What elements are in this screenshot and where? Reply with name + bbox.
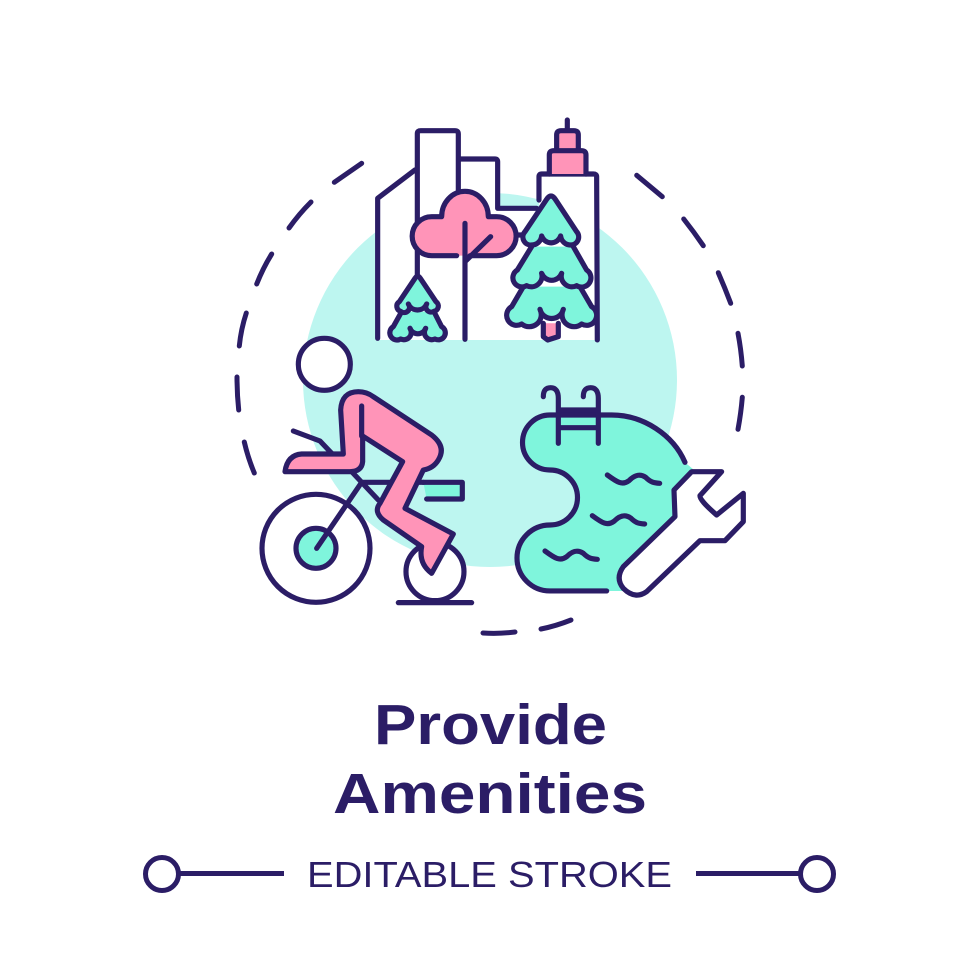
title — [333, 693, 647, 826]
icon: pool with ladder and wrench — [517, 388, 743, 595]
footer: editable stroke: EDITABLE STROKE — [307, 854, 672, 895]
background tint circle — [303, 193, 677, 567]
icon: city with trees — [378, 120, 597, 340]
title: Provide — [374, 693, 607, 757]
icon: cyclist — [262, 338, 472, 603]
dashed ring — [237, 163, 742, 633]
footer: editable stroke — [146, 854, 834, 895]
title: Amenities — [333, 762, 647, 826]
